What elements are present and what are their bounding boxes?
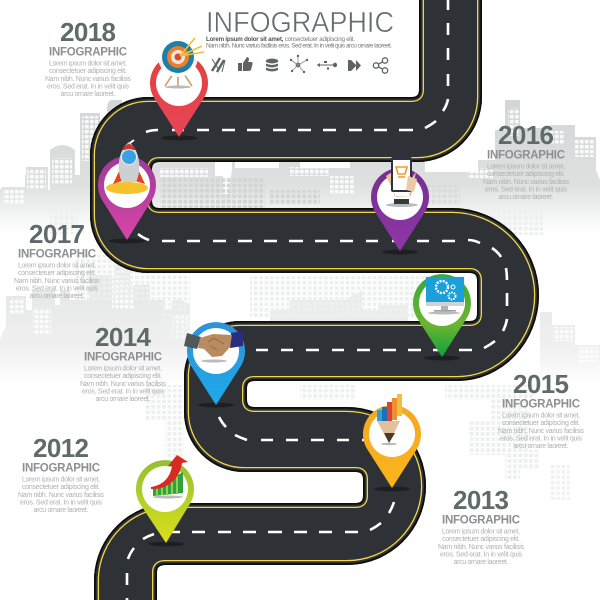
text: 2015: Nam nibh. Nunc varius facilisis	[498, 428, 584, 435]
text: 2012: eros. Sed erat. In in velit quis	[20, 500, 102, 506]
text: 2016	[483, 120, 570, 201]
subtitle	[206, 36, 392, 50]
text: 2018: INFOGRAPHIC	[49, 46, 127, 58]
text: 2018: consectetuer adipiscing elit.	[49, 68, 127, 75]
title: INFOGRAPHIC	[206, 7, 394, 39]
text: 2017: Nam nibh. Nunc varius facilisis	[14, 278, 100, 285]
background: lower city skyline	[0, 265, 600, 385]
text: 2018	[45, 17, 132, 98]
text: 2017: INFOGRAPHIC	[18, 248, 96, 260]
text: 2015: 2015	[513, 369, 569, 399]
text: 2018: Nam nibh. Nunc varius facilisis	[45, 76, 132, 83]
icon: share	[373, 58, 388, 73]
icon: phone with cart	[386, 157, 418, 207]
icon: growth chart with arrow	[151, 455, 188, 498]
text: 2012: consectetuer adipiscing elit.	[22, 484, 100, 491]
icon: rocket	[106, 140, 148, 194]
pin: 2014 handshake	[184, 322, 245, 408]
text: 2014: arcu ornare laoreet.	[96, 396, 151, 403]
pin: 2017 rocket	[98, 140, 156, 244]
text: 2013: INFOGRAPHIC	[442, 514, 520, 526]
icon row	[212, 55, 388, 73]
text: 2014	[80, 322, 166, 403]
subtitle: Lorem ipsum dolor sit amet, consectetuer adipiscing elit.	[206, 36, 355, 43]
text: 2016: Lorem ipsum dolor sit amet,	[487, 164, 565, 170]
text: 2018: arcu ornare laoreet.	[60, 91, 116, 98]
text: 2017: arcu ornare laoreet.	[30, 293, 85, 300]
text: 2015: INFOGRAPHIC	[502, 398, 580, 410]
text: 2015: arcu ornare laoreet.	[514, 443, 569, 450]
text: 2016: Nam nibh. Nunc varius facilisis	[483, 179, 570, 186]
pin: 2013 pencil	[363, 394, 421, 492]
text: 2013: 2013	[453, 485, 509, 515]
text: 2017	[14, 219, 100, 300]
text: 2015	[498, 369, 584, 450]
text: 2012	[18, 433, 104, 514]
text: 2017: eros. Sed erat. In in velit quis	[16, 286, 98, 292]
background: world map of dots	[50, 178, 570, 500]
text: 2012: 2012	[33, 433, 89, 463]
text: 2016: 2016	[498, 120, 554, 150]
text: 2016: eros. Sed erat. In in velit quis	[485, 186, 568, 194]
text: 2014: Lorem ipsum dolor sit amet,	[84, 366, 162, 372]
text: 2014: consectetuer adipiscing elit.	[84, 373, 162, 380]
text: 2014: INFOGRAPHIC	[84, 352, 162, 364]
icon: pencil with bars	[377, 394, 402, 445]
icon: monitor with gears	[426, 277, 464, 314]
pin: 2012 growth chart	[136, 455, 194, 546]
text: 2013	[438, 485, 524, 566]
icon: handshake	[184, 331, 243, 362]
text: 2013: Lorem ipsum dolor sit amet,	[442, 528, 520, 536]
text: 2018: eros. Sed erat. In in velit quis	[47, 84, 130, 90]
text: 2016: arcu ornare laoreet.	[498, 194, 554, 201]
subtitle: Nam nibh. Nunc varius facilisis eros. Sed erat. In in velit quis arcu ornare laoreet.	[206, 42, 392, 50]
text: 2015: consectetuer adipiscing elit.	[502, 420, 580, 427]
icon: usb	[317, 61, 337, 70]
icon: thumbs up	[238, 57, 252, 71]
text: 2013: Nam nibh. Nunc varius facilisis	[438, 544, 524, 551]
text: 2014: 2014	[95, 322, 152, 352]
road	[80, 0, 550, 600]
text: 2012: Nam nibh. Nunc varius facilisis	[18, 492, 104, 499]
text: 2018: 2018	[60, 17, 116, 47]
text: 2013: consectetuer adipiscing elit.	[442, 536, 520, 543]
text: 2015: eros. Sed erat. In in velit quis	[500, 436, 582, 442]
text: 2017: 2017	[29, 219, 85, 249]
icon: database	[266, 58, 278, 72]
text: 2014: Nam nibh. Nunc varius facilisis	[80, 381, 166, 388]
icon: target with arrows	[158, 37, 204, 88]
text: 2017: Lorem ipsum dolor sit amet,	[18, 262, 96, 270]
text: 2016: INFOGRAPHIC	[487, 150, 565, 162]
icon: fast forward	[348, 60, 361, 71]
pin: 2018 target	[150, 37, 208, 140]
text: 2012: arcu ornare laoreet.	[34, 507, 89, 514]
text: 2013: eros. Sed erat. In in velit quis	[440, 552, 522, 558]
icon: network nodes	[290, 55, 308, 73]
text: 2012: INFOGRAPHIC	[22, 462, 100, 474]
text: 2015: Lorem ipsum dolor sit amet,	[502, 412, 580, 420]
text: 2013: arcu ornare laoreet.	[454, 559, 509, 566]
text: 2017: consectetuer adipiscing elit.	[18, 270, 96, 277]
text: 2014: eros. Sed erat. In in velit quis	[82, 388, 164, 396]
background: upper city skyline	[0, 100, 600, 232]
text: 2018: Lorem ipsum dolor sit amet,	[49, 60, 127, 68]
road lane dashes	[127, 0, 507, 600]
pin: 2015 monitor	[413, 274, 471, 360]
icon: tools	[212, 58, 225, 72]
text: 2016: consectetuer adipiscing elit.	[487, 171, 565, 178]
pin: 2016 phone	[371, 157, 429, 254]
text: 2012: Lorem ipsum dolor sit amet,	[22, 476, 100, 484]
